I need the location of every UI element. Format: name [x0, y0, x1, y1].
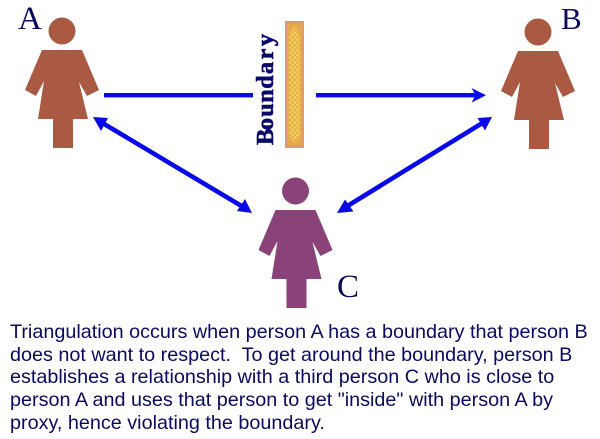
arrow: boundary to B: [316, 88, 486, 103]
boundary label: Boundary: [252, 33, 279, 145]
person A: [25, 18, 99, 148]
double arrow: B and C: [337, 117, 492, 213]
label C: C: [337, 269, 359, 305]
boundary bar: [285, 21, 304, 148]
person C: [258, 178, 332, 308]
arrow: A toward boundary: [104, 93, 253, 97]
explanatory caption: Triangulation occurs when person A has a boundary that person B does not want to respect. To get around the boundary, person B establishes a relationship with a third person C who is close to person A and uses that person to get "inside" with person A by proxy, hence violating the boundary.: [10, 321, 588, 434]
label A: A: [18, 1, 42, 37]
label B: B: [561, 1, 582, 36]
person B: [501, 18, 575, 149]
double arrow: A and C: [93, 117, 252, 213]
